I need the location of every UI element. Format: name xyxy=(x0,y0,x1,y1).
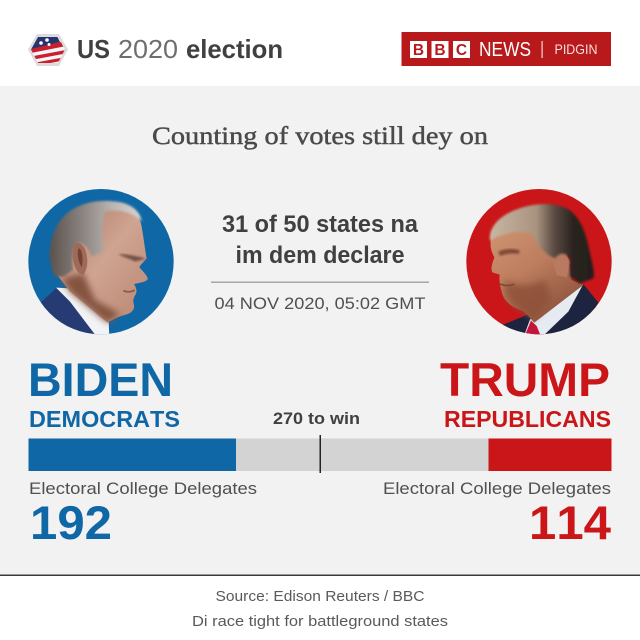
text: delegates label right: Electoral College Delegates xyxy=(383,479,611,498)
logo: BBC News Pidgin: C xyxy=(456,42,467,59)
title: counting of votes: Counting of votes still dey on xyxy=(152,123,489,150)
heading: US 2020 election: election xyxy=(186,34,283,64)
portrait: Biden xyxy=(28,189,174,340)
chart: electoral college bar xyxy=(28,435,612,473)
text: states declared: 31 of 50 states na xyxy=(222,211,419,238)
text: source: Source: Edison Reuters / BBC xyxy=(216,588,425,605)
label: Trump: TRUMP xyxy=(440,353,610,406)
heading: US 2020 election: US xyxy=(77,34,110,64)
label: Republicans: REPUBLICANS xyxy=(444,406,611,432)
label: Biden: BIDEN xyxy=(28,353,173,406)
number: Trump 114: 114 xyxy=(529,496,611,549)
number: Biden 192: 192 xyxy=(30,496,112,549)
logo: BBC News Pidgin: PIDGIN xyxy=(554,41,598,57)
heading: US 2020 election xyxy=(77,34,283,64)
text: date and time: 04 NOV 2020, 05:02 GMT xyxy=(214,294,426,313)
text: states declared: im dem declare xyxy=(236,242,404,269)
heading: US 2020 election: 2020 xyxy=(118,34,178,64)
text: delegates label left: Electoral College Delegates xyxy=(29,479,257,498)
label: 270 to win: 270 to win xyxy=(273,409,360,428)
logo: BBC News Pidgin: B xyxy=(434,42,446,59)
icon: US flag hexagon xyxy=(28,34,68,66)
portrait: Trump xyxy=(466,189,612,338)
logo: BBC News Pidgin: NEWS xyxy=(479,39,531,61)
label: Democrats: DEMOCRATS xyxy=(29,406,180,432)
divider under states text xyxy=(211,282,429,283)
logo: BBC News Pidgin xyxy=(402,32,611,66)
panel: main background xyxy=(0,86,640,575)
logo: BBC News Pidgin: B xyxy=(413,42,424,59)
text: states declared xyxy=(222,211,419,269)
text: caption: Di race tight for battleground states xyxy=(192,613,448,630)
panel: footer divider xyxy=(0,574,640,576)
